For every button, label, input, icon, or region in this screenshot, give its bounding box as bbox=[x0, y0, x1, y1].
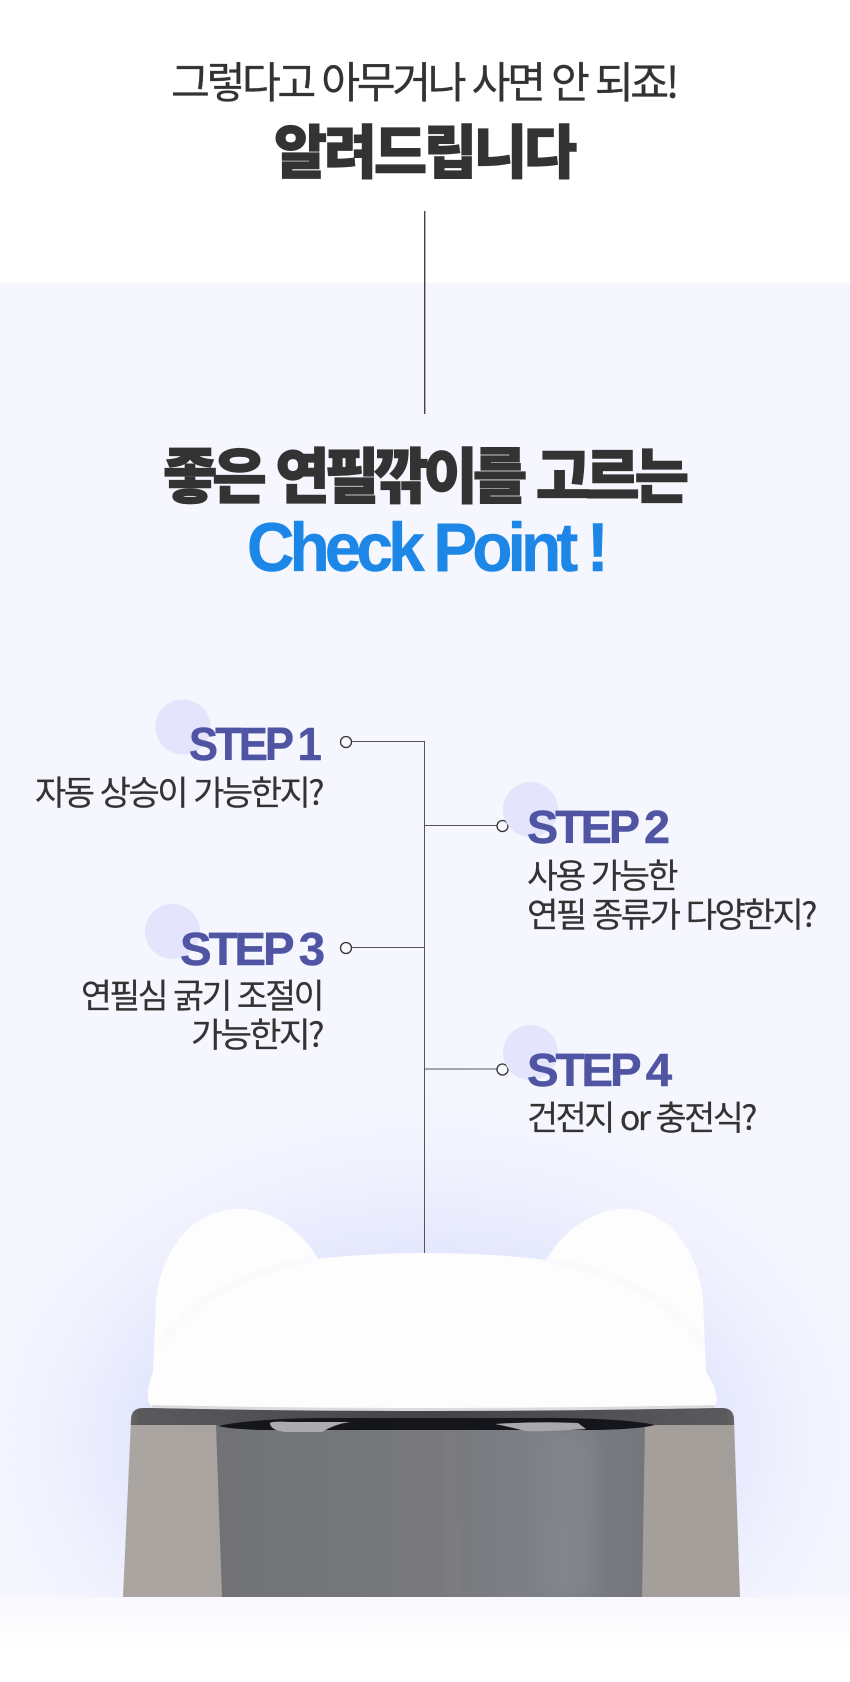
step 4: 건전지 or 충전식? bbox=[527, 1091, 756, 1140]
heading: top intro bbox=[171, 49, 676, 190]
heading: top intro: 알려드립니다 bbox=[274, 106, 577, 190]
step 3: 가능한지? bbox=[191, 1008, 323, 1057]
heading: check point: 좋은 연필깎이를 고르는 bbox=[163, 429, 688, 516]
step 2: 사용 가능한 bbox=[527, 849, 678, 898]
step 2: STEP 2 bbox=[527, 801, 668, 853]
heading: check point: Check Point ! bbox=[247, 509, 604, 586]
top connector line bbox=[424, 211, 425, 414]
step 3 bbox=[81, 904, 323, 1057]
step 1: STEP 1 bbox=[189, 718, 321, 770]
step 3: STEP 3 bbox=[180, 923, 323, 975]
step 2: 연필 종류가 다양한지? bbox=[527, 888, 816, 937]
connector tree bbox=[340, 736, 508, 1253]
heading: check point bbox=[163, 429, 688, 586]
step 2 bbox=[503, 782, 816, 937]
step 4: STEP 4 bbox=[527, 1044, 673, 1096]
step 1: 자동 상승이 가능한지? bbox=[35, 766, 323, 815]
heading: top intro: 그렇다고 아무거나 사면 안 되죠! bbox=[171, 49, 676, 111]
bottle cap with bear ears bbox=[148, 1209, 717, 1411]
step 4 bbox=[503, 1025, 756, 1140]
step 3: 연필심 굵기 조절이 bbox=[81, 969, 322, 1018]
step 1 bbox=[35, 700, 323, 815]
bottle body bbox=[120, 1405, 745, 1597]
